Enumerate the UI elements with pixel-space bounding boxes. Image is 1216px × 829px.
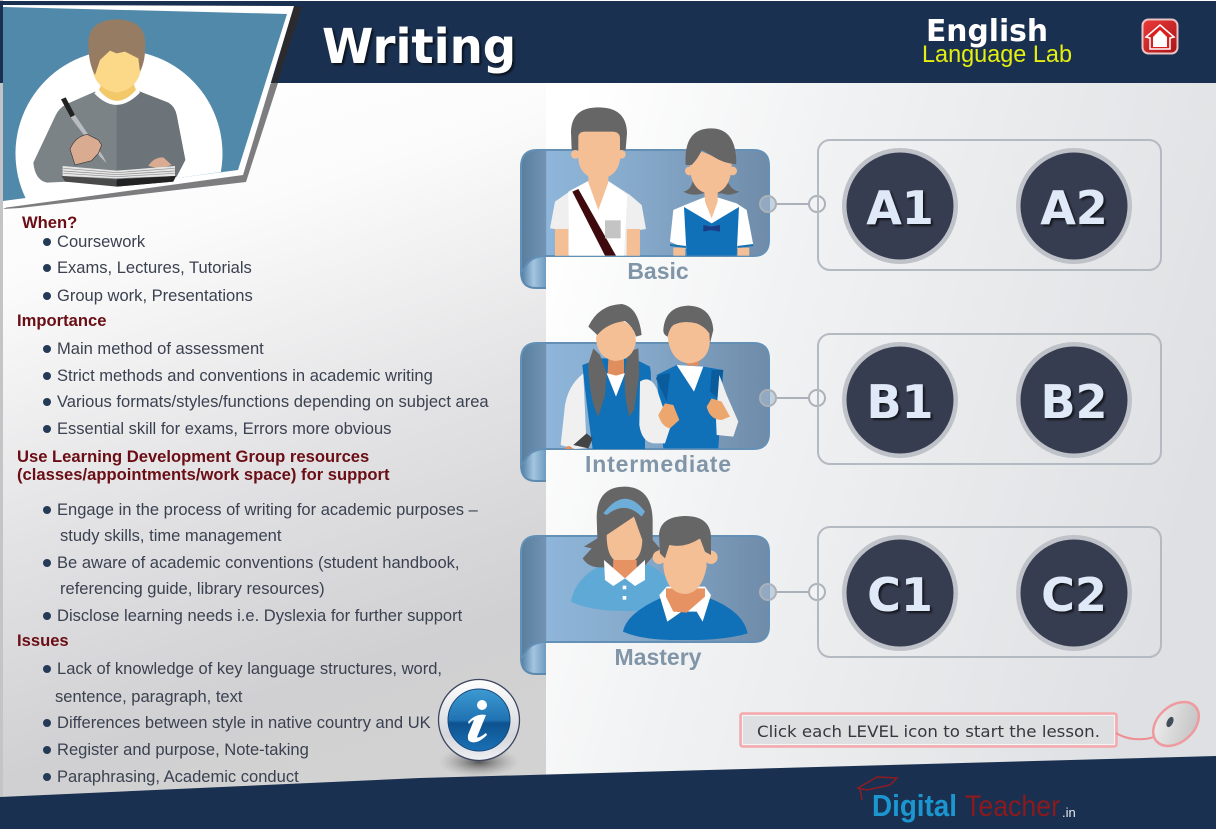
logo text: English Language Lab: Language Lab [922,41,1072,68]
photo panel: student writing [3,5,302,209]
section: Use Learning Development Group resources: study skills, time management [60,526,282,545]
level box [818,334,1161,464]
button: A2 [1016,148,1132,264]
section: Importance: Essential skill for exams, Errors more obvious [57,419,391,438]
section: Issues: Lack of knowledge of key language structures, word, [57,659,442,678]
label: Intermediate [585,451,731,477]
section: Importance: Importance [17,311,106,330]
level row: Basic [521,107,1161,288]
section: Use Learning Development Group resources: Engage in the process of writing for academic purposes – [57,500,479,519]
section: Issues: Differences between style in native country and UK [57,713,431,732]
button: B1 [842,342,958,458]
button: B1: B1 [866,375,934,429]
section: Use Learning Development Group resources: referencing guide, library resources) [60,579,325,598]
icon: writer figure [33,19,185,187]
level row: Mastery [521,487,1161,674]
figures: school boy and girl [550,107,753,256]
button: B2 [1016,342,1132,458]
button: C1 [842,535,958,651]
banner ribbon [521,150,769,288]
section: Issues [17,631,442,786]
button: A1: A1 [866,181,934,235]
logo: Digital Teacher: Digital [872,788,957,823]
logo: Digital Teacher [858,777,1076,823]
button: B2: B2 [1040,375,1108,429]
section: When? [22,213,253,305]
footer bar [0,756,1216,829]
section: Use Learning Development Group resources: Use Learning Development Group resources [17,447,369,466]
header bar [0,1,1216,83]
button: C2 [1016,535,1132,651]
logo: Digital Teacher: Teacher [965,790,1060,823]
section: Importance: Strict methods and conventions in academic writing [57,366,433,385]
section: Issues: Register and purpose, Note-taking [57,740,309,759]
callout: lesson instruction: Click each LEVEL icon to start the lesson. [757,722,1100,741]
level row: Intermediate [521,304,1161,481]
icon: home button [1142,20,1178,54]
logo text: English Language Lab: English [926,14,1048,49]
figures: woman and man [571,487,748,640]
section: Use Learning Development Group resources [17,447,479,625]
logo text: English Language Lab [922,14,1072,68]
banner ribbon [521,536,769,674]
section: Use Learning Development Group resources: (classes/appointments/work space) for support [17,465,390,484]
text panel: left column [17,213,489,786]
icon: mouse with cable [1116,693,1207,755]
section: Importance: Various formats/styles/functions depending on subject area [57,392,489,411]
icon: info button [438,680,520,777]
section: When?: Exams, Lectures, Tutorials [57,258,252,277]
section: Issues: Paraphrasing, Academic conduct [57,767,299,786]
section: When?: Group work, Presentations [57,286,253,305]
section: When?: Coursework [57,232,146,251]
logo: Digital Teacher: .in [1062,805,1076,820]
title: Writing [322,19,516,75]
level box [818,140,1161,270]
connector [760,196,825,212]
banner ribbon [521,343,769,481]
section: Importance: Main method of assessment [57,339,264,358]
section: Use Learning Development Group resources: Disclose learning needs i.e. Dyslexia for further support [57,606,463,625]
level box [818,527,1161,657]
button: A2: A2 [1040,181,1108,235]
button: A1 [842,148,958,264]
button: C2: C2 [1041,568,1107,622]
section: When?: When? [22,213,77,232]
label: Basic [627,258,689,284]
connector [760,390,825,406]
label: Mastery [615,644,702,670]
connector [760,584,825,600]
section: Use Learning Development Group resources: Be aware of academic conventions (student handbook, [57,553,460,572]
section: Issues: sentence, paragraph, text [55,687,243,706]
callout: lesson instruction [740,714,1116,746]
figures: two students with vests [561,304,738,449]
button: C1: C1 [867,568,933,622]
section: Issues: Issues [17,631,69,650]
section: Importance [17,311,489,438]
